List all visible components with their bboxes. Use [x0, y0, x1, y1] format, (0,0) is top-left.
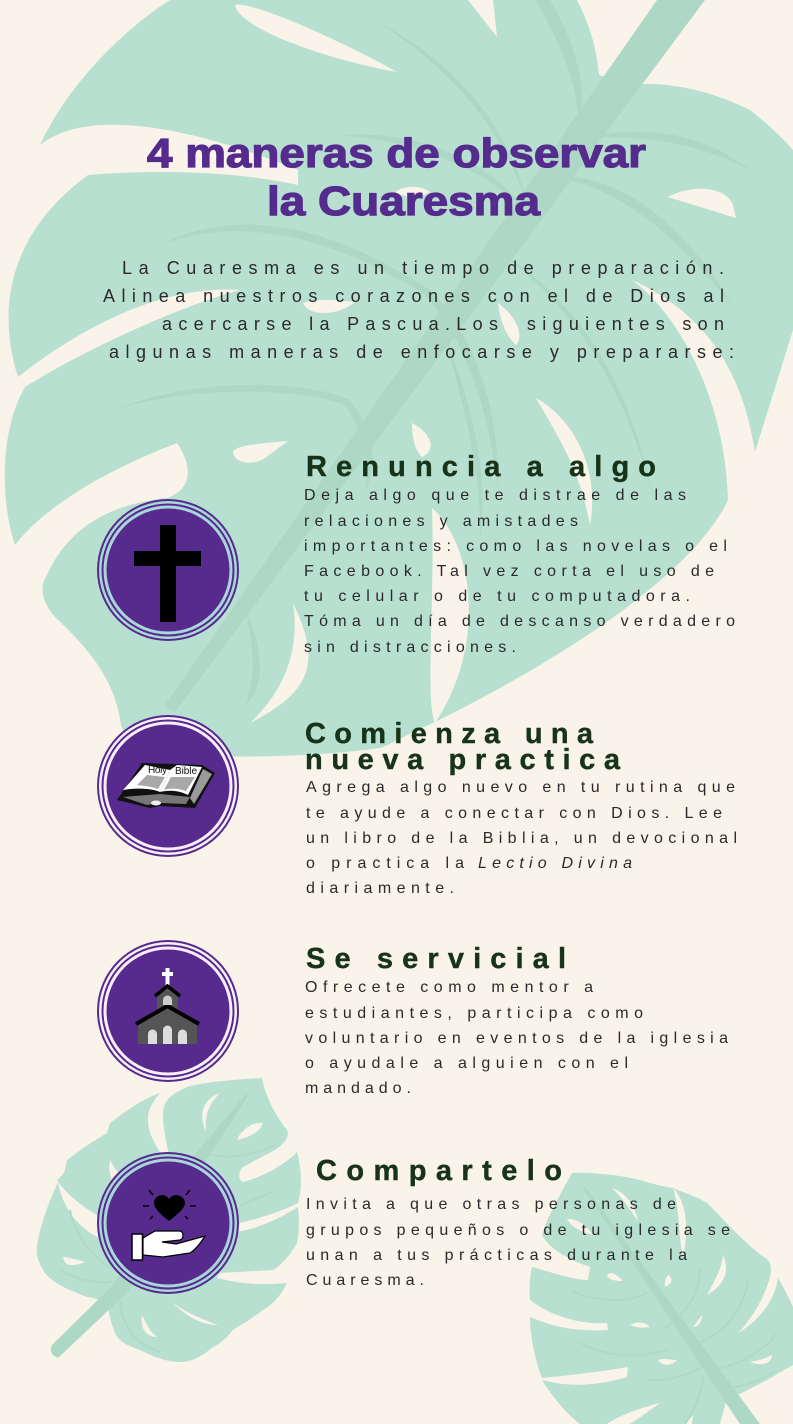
- step 1 text: relaciones y amistades: [304, 513, 578, 530]
- step 2 icon: open bible: Holy: [148, 765, 167, 776]
- step 4 text: Compartelo: [316, 1155, 562, 1187]
- step 4 text: [306, 1155, 730, 1289]
- step 3 text: mandado.: [305, 1080, 411, 1097]
- step 4 text: grupos pequeños o de tu iglesia se: [306, 1222, 730, 1239]
- intro paragraph: algunas maneras de enfocarse y prepararse:: [109, 342, 734, 362]
- step 3 text: [305, 943, 728, 1097]
- step 2 text: [305, 718, 737, 897]
- step 2 icon: open bible: Bible: [175, 766, 197, 777]
- intro paragraph: Alinea nuestros corazones con el de Dios al: [103, 286, 724, 306]
- step 3 text: Se servicial: [306, 943, 566, 975]
- step 1 text: Deja algo que te distrae de las: [304, 487, 686, 504]
- step 2 text: o practica la: [306, 855, 464, 872]
- step 1 text: importantes: como las novelas o el: [304, 538, 727, 555]
- step 2 text: Comienza una: [305, 718, 594, 750]
- step 2 text: un libro de la Biblia, un devocional: [306, 830, 737, 847]
- step 3 text: Ofrecete como mentor a: [305, 979, 593, 996]
- intro paragraph: [103, 258, 734, 362]
- step 1 icon: cross: [97, 499, 239, 641]
- step 2 icon: open bible: [97, 715, 239, 857]
- small monstera leaf, lower right: [530, 1173, 793, 1424]
- step 3 text: o ayudale a alguien con el: [305, 1055, 628, 1072]
- step 1 text: tu celular o de tu computadora.: [304, 588, 690, 605]
- step 2 text: Lectio Divina: [478, 855, 632, 872]
- step 2 text: te ayude a conectar con Dios. Lee: [306, 805, 722, 822]
- step 4 icon: heart in hand: [97, 1152, 239, 1294]
- intro paragraph: acercarse la Pascua.Los siguientes son: [162, 314, 724, 334]
- step 4 text: Invita a que otras personas de: [306, 1196, 676, 1213]
- title: 4 maneras de observar: [147, 130, 646, 176]
- large monstera leaf: [5, 0, 793, 757]
- step 3 icon: church: [97, 940, 239, 1082]
- small monstera leaf, lower left: [37, 1078, 301, 1362]
- step 1 text: [304, 451, 735, 656]
- title: la Cuaresma: [267, 178, 541, 224]
- step 3 text: estudiantes, participa como: [305, 1005, 643, 1022]
- step 2 text: Agrega algo nuevo en tu rutina que: [306, 779, 735, 796]
- step 1 text: Tóma un día de descanso verdadero: [304, 613, 735, 630]
- intro paragraph: La Cuaresma es un tiempo de preparación.: [122, 258, 724, 278]
- step 1 text: Renuncia a algo: [306, 451, 656, 483]
- step 2 text: diariamente.: [306, 880, 454, 897]
- step 1 text: Facebook. Tal vez corta el uso de: [304, 563, 714, 580]
- step 2 text: nueva practica: [305, 744, 621, 776]
- step 4 text: unan a tus prácticas durante la: [306, 1247, 687, 1264]
- step 1 text: sin distracciones.: [304, 639, 516, 656]
- title: [147, 130, 646, 224]
- step 3 text: voluntario en eventos de la iglesia: [305, 1030, 728, 1047]
- step 4 text: Cuaresma.: [306, 1272, 424, 1289]
